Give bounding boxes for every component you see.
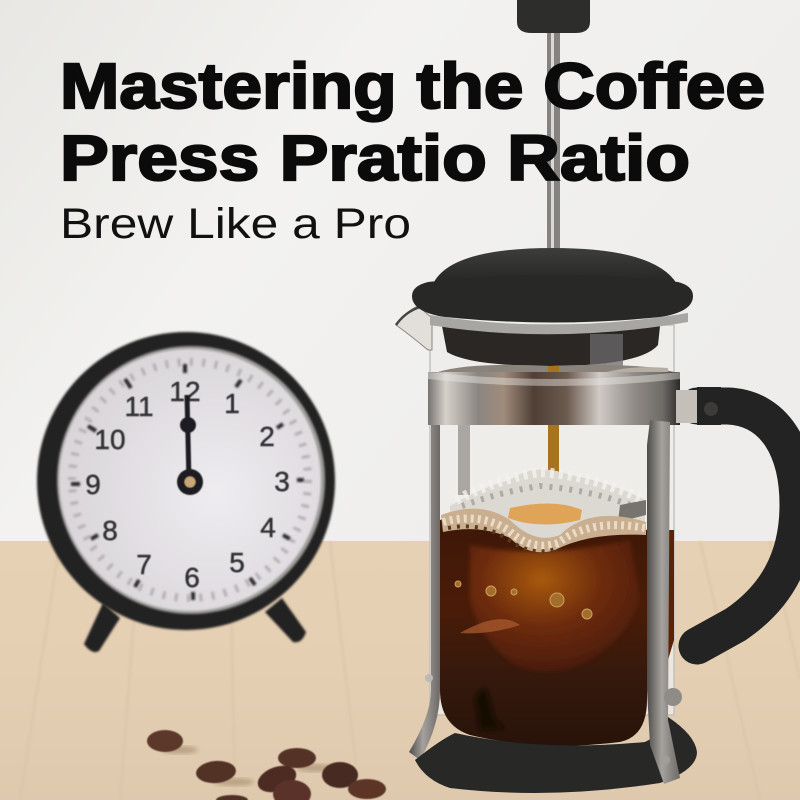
- clock numerals: 4: [260, 512, 276, 543]
- coffee stream: [548, 366, 559, 526]
- mesh filter: [438, 365, 674, 385]
- clock body: [37, 332, 335, 630]
- base: [415, 717, 697, 793]
- clock numerals: 5: [229, 547, 245, 578]
- clock numerals: 9: [85, 469, 101, 500]
- french press: [396, 0, 798, 793]
- plunger rod: [547, 33, 560, 258]
- clock numerals: 2: [259, 421, 275, 452]
- plunger knob: [517, 0, 590, 33]
- wall background: [0, 0, 800, 541]
- clock face: [59, 349, 321, 611]
- rivets: [425, 674, 433, 682]
- clock numerals: 1: [224, 388, 240, 419]
- clock numerals: 6: [184, 562, 200, 593]
- lid: [412, 248, 693, 322]
- clock numerals: 12: [169, 376, 201, 407]
- pour spout: [396, 306, 432, 350]
- clock numerals: 8: [102, 515, 118, 546]
- lid silver ring: [430, 313, 688, 334]
- back glass strut: [458, 420, 470, 495]
- back foam: [450, 470, 646, 540]
- title: [60, 50, 765, 194]
- wooden table: [0, 541, 800, 800]
- clock bezel: [57, 346, 325, 614]
- right frame strip: [647, 420, 680, 784]
- handle: [697, 406, 798, 646]
- amber glow: [470, 540, 640, 671]
- left frame strip: [409, 425, 440, 760]
- coffee liquid: [440, 514, 647, 746]
- coffee beans: [147, 730, 386, 800]
- clock numerals: 11: [124, 391, 154, 422]
- clock numerals: 7: [136, 549, 152, 580]
- handle connector: [676, 390, 698, 423]
- clock feet: [84, 598, 306, 652]
- clock hands: [177, 395, 203, 495]
- glass body: [430, 325, 674, 715]
- bubbles: [455, 581, 592, 619]
- clock: [37, 332, 335, 652]
- foam layer: [441, 509, 646, 552]
- tick marks: [71, 362, 308, 600]
- clock numerals: 3: [274, 466, 290, 497]
- inner plunger disc: [442, 326, 660, 366]
- title: Press Pratio Ratio: [60, 122, 690, 194]
- title: Mastering the Coffee: [60, 50, 765, 122]
- clock numerals: 10: [94, 424, 126, 455]
- metal band: [428, 372, 680, 425]
- clock numerals: [85, 376, 290, 593]
- subtitle: Brew Like a Pro: [60, 200, 411, 248]
